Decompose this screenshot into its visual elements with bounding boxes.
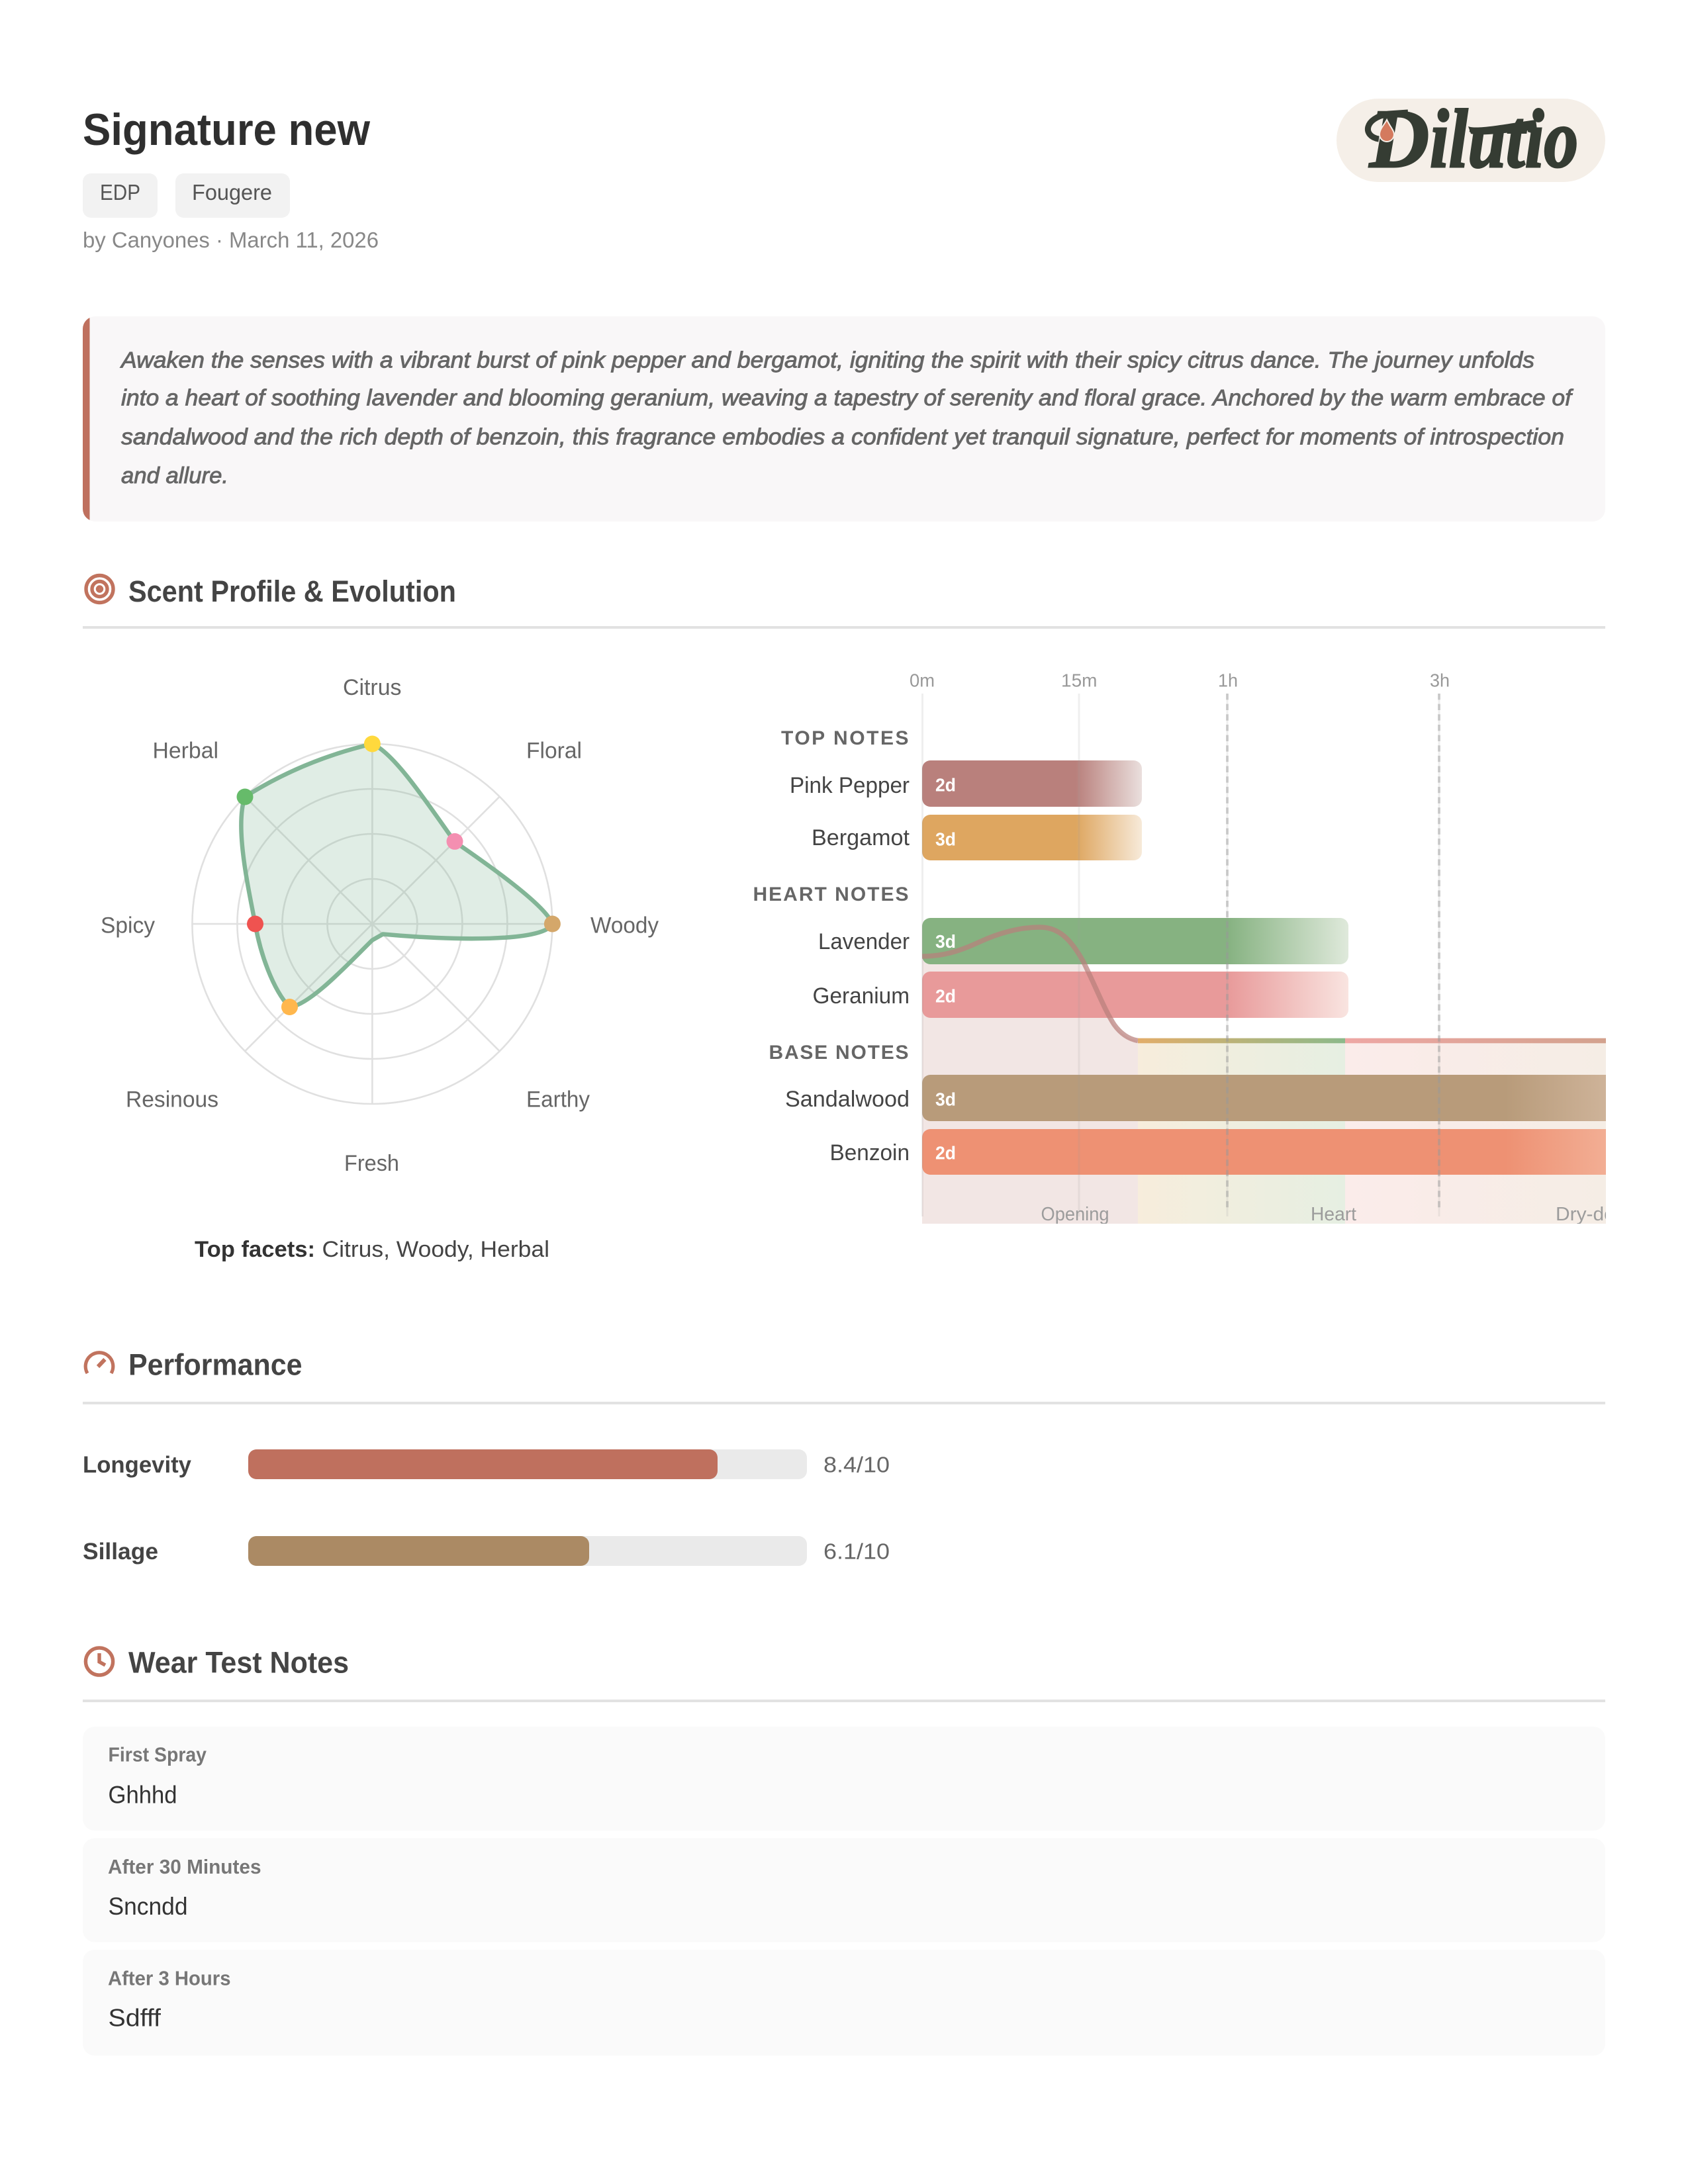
section heading: Wear Test Notes: [83, 1645, 1605, 1702]
note: Pink Pepper: [790, 760, 1142, 807]
note: Benzoin: 2d: [935, 1142, 956, 1163]
metric: Sillage: 6.1/10: [823, 1539, 890, 1565]
top facets: Citrus, Woody, Herbal: [322, 1237, 549, 1262]
axis labels: 3h: [1430, 670, 1450, 691]
zone labels: [1042, 1206, 1606, 1224]
note: Bergamot: Bergamot: [812, 825, 910, 850]
metric: Longevity: 8.4/10: [823, 1453, 890, 1477]
panel: description quote: [83, 316, 1605, 522]
group heading: heart notes: HEART NOTES: [753, 884, 908, 905]
axis labels: 1h: [1218, 670, 1238, 691]
zone labels: Heart: [1311, 1204, 1356, 1225]
note: Lavender: 3d: [935, 931, 956, 952]
zone labels: Opening: [1041, 1204, 1109, 1225]
group heading: top notes: TOP NOTES: [781, 727, 908, 749]
section heading: Scent Profile & Evolution: [83, 574, 1605, 629]
axis labels: 0m: [910, 670, 935, 691]
header: [83, 105, 379, 252]
metric: Sillage: Sillage: [83, 1538, 158, 1565]
quote text: into a heart of soothing lavender and blooming geranium, weaving a tapestry of serenity and floral grace. Anchored by the warm embrace of: [121, 385, 1574, 410]
time gridlines: [923, 694, 1439, 1216]
section heading: Performance: Performance: [128, 1347, 302, 1382]
timeline zone bands: [922, 958, 1606, 1224]
card: First Spray: Ghhhd: [109, 1782, 177, 1808]
radar axis labels: Floral: [526, 739, 582, 764]
title: Signature new: [83, 105, 370, 155]
icon: gauge: [85, 1353, 113, 1373]
note: Sandalwood: 3d: [935, 1089, 956, 1109]
section heading: Performance: [83, 1347, 1605, 1404]
quote text: and allure.: [121, 463, 228, 488]
radar axis labels: Herbal: [152, 739, 218, 764]
axis labels: 15m: [1061, 670, 1098, 691]
quote text: sandalwood and the rich depth of benzoin, this fragrance embodies a confident yet tranquil signature, perfect for moments of introspection: [121, 425, 1564, 450]
radar data shape: [241, 744, 552, 1007]
axis labels: [910, 670, 1450, 691]
note: Bergamot: 3d: [935, 829, 956, 850]
radar grid: [192, 744, 552, 1104]
note: Sandalwood: [785, 1075, 1650, 1121]
section heading: Scent Profile & Evolution: Scent Profile & Evolution: [128, 574, 456, 608]
tag: Fougere: Fougere: [192, 180, 272, 205]
icon: clock: [85, 1648, 113, 1675]
radar axis labels: Woody: [590, 913, 659, 938]
note: Pink Pepper: 2d: [935, 774, 956, 796]
timeline chart: [753, 670, 1650, 1225]
infographic page: [83, 99, 1606, 2026]
note: Benzoin: Benzoin: [830, 1140, 910, 1165]
logo: Dilutio: [1336, 93, 1605, 185]
radar chart: [101, 675, 659, 1262]
quote text: Awaken the senses with a vibrant burst of pink pepper and bergamot, igniting the spirit with their spicy citrus dance. The journey unfolds: [120, 348, 1534, 373]
note: Geranium: 2d: [935, 986, 956, 1006]
logo: Dilutio: ilutio: [1430, 93, 1578, 185]
card: After 3 Hours: [83, 1950, 1605, 2056]
note: Bergamot: [812, 815, 1142, 860]
quote text: [120, 348, 1574, 488]
logo: Dilutio: D: [1369, 93, 1429, 185]
metric: Sillage: [83, 1536, 890, 1566]
radar axis labels: Citrus: [343, 675, 401, 700]
radar axis labels: [101, 675, 659, 1176]
card: First Spray: First Spray: [109, 1743, 207, 1766]
tag: EDP: EDP: [100, 180, 140, 205]
intensity curve: [922, 927, 1606, 1043]
card: After 3 Hours: Sdfff: [109, 2004, 162, 2032]
card: After 3 Hours: After 3 Hours: [108, 1967, 230, 1989]
radar axis labels: Spicy: [101, 913, 155, 938]
note: Geranium: [813, 972, 1348, 1018]
card: After 30 Minutes: After 30 Minutes: [108, 1855, 261, 1878]
group heading: base notes: BASE NOTES: [769, 1042, 908, 1064]
note: Lavender: Lavender: [818, 929, 910, 954]
icon: target: [86, 576, 113, 602]
metric: Longevity: [83, 1449, 890, 1479]
top facets: [195, 1237, 549, 1262]
top facets: Top facets:: [195, 1237, 315, 1262]
radar axis labels: Fresh: [344, 1151, 399, 1176]
note: Pink Pepper: Pink Pepper: [790, 773, 910, 798]
author and date: by Canyones · March 11, 2026: [83, 228, 379, 252]
radar axis labels: Resinous: [126, 1087, 218, 1112]
note: Lavender: [818, 918, 1348, 964]
note: Benzoin: [830, 1129, 1650, 1175]
note: Sandalwood: Sandalwood: [785, 1087, 910, 1112]
tag: Fougere: [175, 173, 290, 218]
radar axis labels: Earthy: [526, 1087, 590, 1112]
zone labels: Dry-down: [1556, 1204, 1640, 1225]
card: First Spray: [83, 1727, 1605, 1831]
metric: Longevity: Longevity: [83, 1451, 191, 1478]
tag: EDP: [83, 173, 158, 218]
card: After 30 Minutes: [83, 1839, 1605, 1942]
section heading: Wear Test Notes: Wear Test Notes: [128, 1645, 349, 1680]
note: Geranium: Geranium: [813, 983, 910, 1009]
radar dots: [237, 736, 561, 1015]
card: After 30 Minutes: Sncndd: [109, 1893, 188, 1920]
